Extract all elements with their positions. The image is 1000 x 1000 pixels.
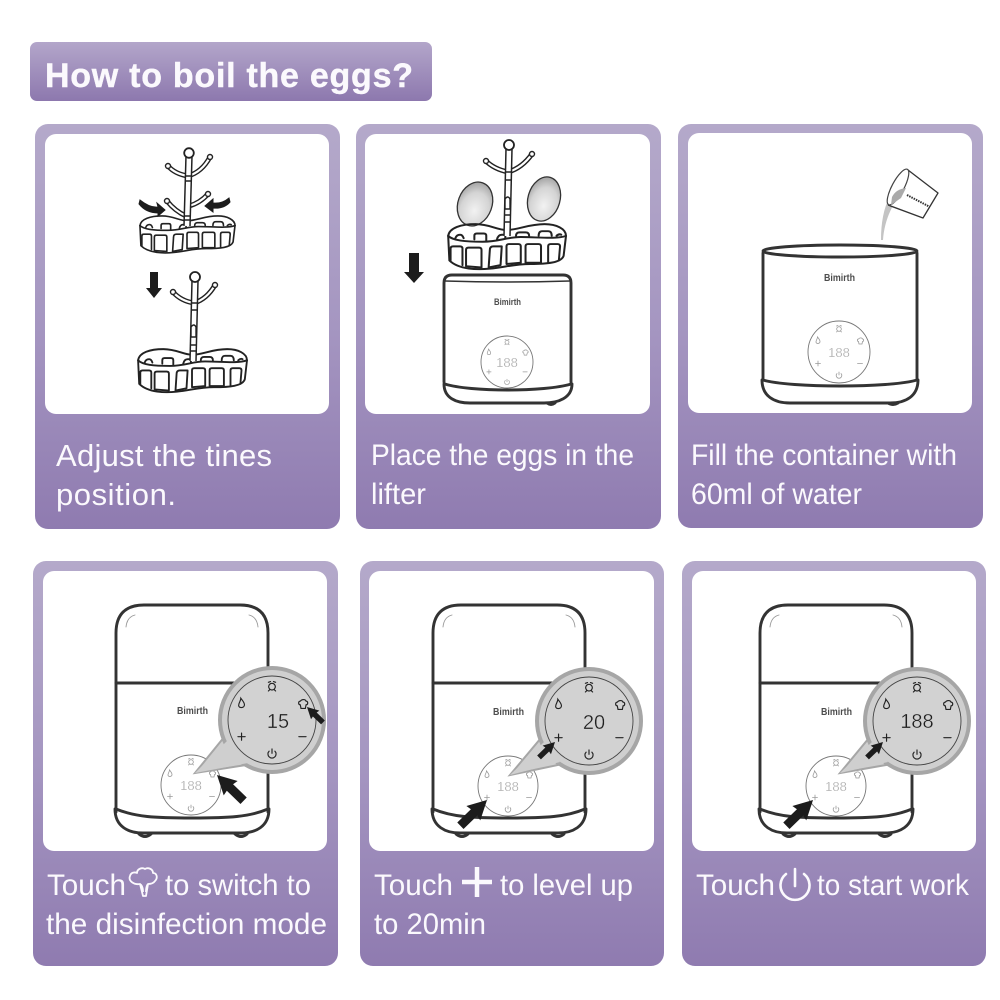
icon: large pointer arrow	[210, 768, 251, 808]
icon: down arrow	[146, 272, 162, 298]
caption: to switch to	[165, 869, 311, 902]
caption	[56, 438, 272, 512]
control dial: 188	[496, 355, 518, 370]
control dial	[478, 756, 538, 816]
caption	[696, 869, 970, 902]
illustration: upper rack with tree	[140, 148, 235, 253]
caption	[691, 439, 957, 511]
caption: the disinfection mode	[46, 908, 327, 941]
icon: power	[780, 869, 809, 900]
brand label: Bimirth	[177, 705, 208, 717]
panel: step 5 level up	[360, 561, 664, 966]
illustration: machine	[432, 605, 586, 836]
illustration: rack with tree	[448, 140, 566, 269]
control dial	[806, 756, 866, 816]
caption: to 20min	[374, 908, 486, 941]
caption: Place the eggs in the	[371, 439, 634, 472]
icon: large pointer arrow	[779, 793, 820, 833]
icon: down arrow	[404, 253, 424, 283]
caption: Fill the container with	[691, 439, 957, 472]
illustration: machine base	[444, 275, 572, 404]
control dial: 188	[825, 779, 847, 794]
panel: step 3 fill water	[678, 124, 983, 528]
icon: steam cloud	[130, 868, 157, 896]
caption	[46, 868, 327, 941]
caption: Adjust the tines	[56, 438, 272, 473]
icon: egg right	[522, 173, 566, 225]
icon: large pointer arrow	[453, 793, 494, 833]
magnifier callout	[195, 668, 324, 773]
panel: step 2 place eggs	[356, 124, 661, 529]
control dial: 188	[180, 778, 202, 793]
caption: to start work	[817, 869, 970, 902]
caption: position.	[56, 477, 176, 512]
caption	[371, 439, 634, 511]
control dial	[481, 336, 533, 388]
caption: Touch	[374, 869, 453, 902]
icon: small pointer arrow	[863, 738, 887, 762]
panel: step 1 adjust tines	[35, 124, 340, 529]
control dial	[808, 321, 870, 383]
caption: to level up	[500, 869, 633, 902]
magnifier callout: 20	[583, 712, 605, 734]
caption: Touch	[696, 869, 775, 902]
brand label: Bimirth	[494, 297, 521, 308]
icon: measuring jug pouring water	[881, 167, 938, 240]
illustration: machine	[759, 605, 913, 836]
control dial: 188	[828, 345, 850, 360]
panel: step 4 disinfection mode	[33, 561, 338, 966]
illustration: machine base	[762, 245, 918, 404]
magnifier callout	[510, 669, 641, 775]
icon: curved arrow right	[205, 198, 230, 212]
magnifier callout: 188	[900, 711, 934, 733]
brand label: Bimirth	[493, 706, 524, 718]
icon: plus	[462, 867, 492, 897]
icon: curved arrow left	[139, 200, 165, 216]
illustration: lower rack with tree	[138, 272, 247, 392]
illustration: machine	[115, 605, 269, 836]
magnifier callout: 15	[267, 711, 289, 733]
icon: egg left	[451, 177, 499, 231]
caption: 60ml of water	[691, 478, 862, 511]
title banner	[30, 42, 432, 101]
panel: step 6 start work	[682, 561, 986, 966]
icon: small pointer arrow	[535, 738, 559, 762]
icon: small pointer arrow	[303, 703, 327, 727]
caption: lifter	[371, 478, 426, 511]
brand label: Bimirth	[821, 706, 852, 718]
control dial	[161, 755, 221, 815]
brand label: Bimirth	[824, 272, 855, 284]
title text: How to boil the eggs?	[45, 57, 413, 95]
caption: Touch	[47, 869, 126, 902]
magnifier callout	[840, 669, 969, 773]
caption	[374, 867, 633, 941]
control dial: 188	[497, 779, 519, 794]
